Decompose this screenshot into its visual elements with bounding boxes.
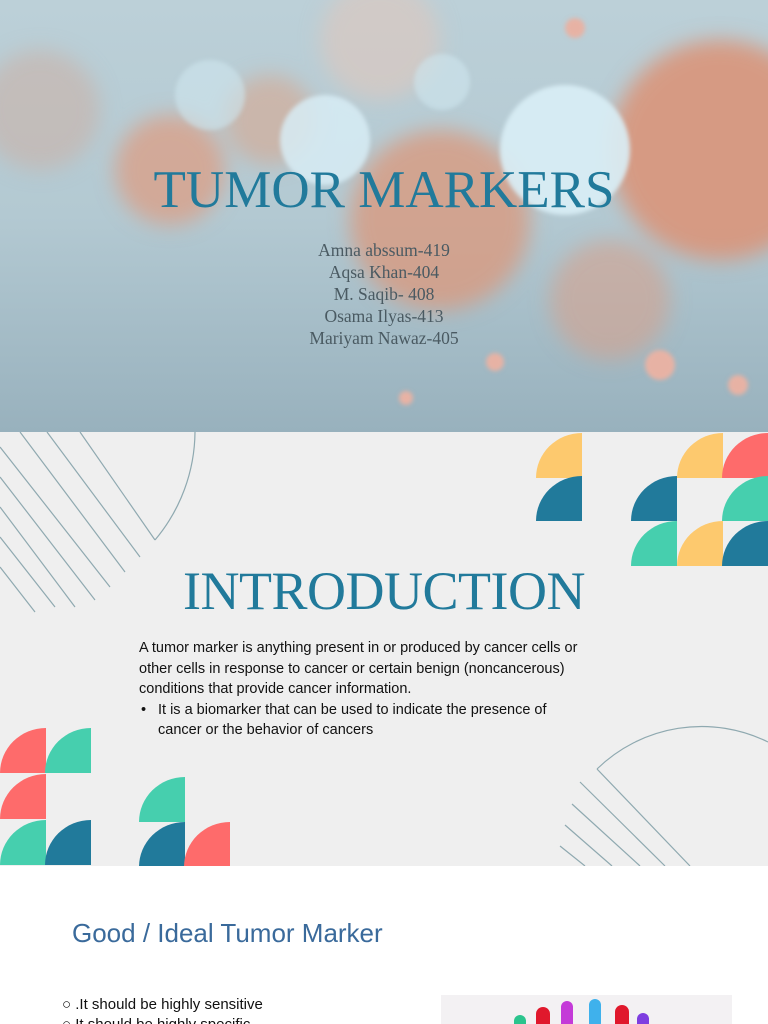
bullet list <box>62 996 263 1024</box>
text block: definition: It is a biomarker that can be used to indicate the presence of cancer or the behavior of cancers <box>158 702 547 738</box>
bullet list: ○ .It should be highly sensitive <box>62 996 263 1013</box>
text block: definition: A tumor marker is anything present in or produced by cancer cells or other cells in response to cancer or certain benign (noncancerous) conditions that provide cancer information. <box>139 640 577 697</box>
heading: introduction: INTRODUCTION <box>183 561 585 621</box>
text block: definition: • <box>141 702 146 718</box>
panel: introduction <box>0 432 768 866</box>
panel: title slide <box>0 0 768 432</box>
decorative shapes: top right <box>536 433 768 566</box>
panel: ideal tumor marker <box>0 866 768 1024</box>
author list: Mariyam Nawaz-405 <box>309 328 459 348</box>
text block: definition <box>139 640 578 738</box>
image: test tubes <box>441 995 732 1024</box>
author list: M. Saqib- 408 <box>334 284 434 304</box>
heading: Good / Ideal Tumor Marker <box>72 918 383 948</box>
title: TUMOR MARKERS <box>154 161 614 219</box>
author list: Aqsa Khan-404 <box>329 262 439 282</box>
author list <box>309 240 459 348</box>
author list: Osama Ilyas-413 <box>324 306 444 326</box>
decorative shapes: bottom left <box>0 728 230 866</box>
author list: Amna abssum-419 <box>318 240 450 260</box>
